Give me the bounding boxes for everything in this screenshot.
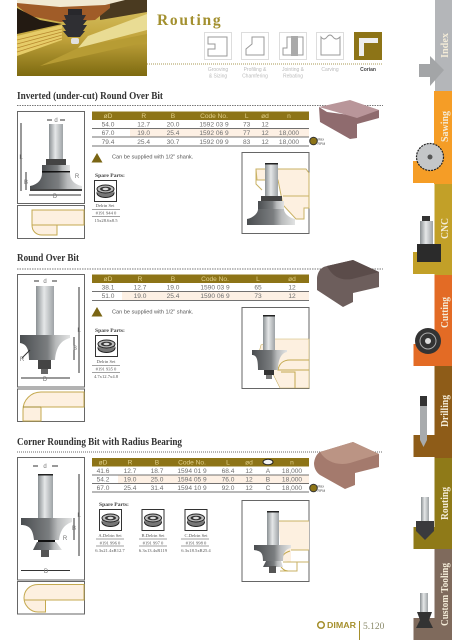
table: inverted bit: 12 bbox=[261, 139, 269, 146]
sidebar tab: custom tooling: Custom Tooling bbox=[440, 563, 451, 626]
table: inverted bit: 1592 06 9 bbox=[199, 130, 229, 137]
icon: profiling bbox=[242, 32, 268, 60]
panel: round over bit in work bbox=[242, 308, 309, 388]
panel: inverted bit diagram: d bbox=[54, 118, 58, 124]
sidebar tab: drilling bbox=[414, 366, 452, 458]
table: corner rounding bit bbox=[92, 458, 309, 492]
heading: round over bit: Round Over Bit bbox=[17, 253, 80, 264]
product image: corner rounding sample bbox=[314, 442, 379, 489]
panel: corner rounding bit in work bbox=[242, 500, 309, 582]
table: round over bit: 12 bbox=[288, 293, 296, 300]
table: inverted bit: 25.4 bbox=[167, 130, 180, 137]
table: inverted bit: 79.4 bbox=[102, 139, 115, 146]
icon: max rpm: RPM bbox=[318, 489, 325, 493]
spare parts: corner rounding bit: 6.3x21.4xR12.7 bbox=[95, 548, 125, 553]
table: corner rounding bit: 54.2 bbox=[97, 476, 110, 484]
panel: corner rounding bit diagram: D bbox=[44, 569, 49, 575]
table: inverted bit: Code No. bbox=[200, 113, 228, 120]
icon: warning triangle bbox=[92, 153, 102, 162]
table: corner rounding bit: 12 bbox=[245, 476, 253, 484]
table: inverted bit: 12.7 bbox=[137, 122, 150, 128]
table: corner rounding bit: ød bbox=[245, 460, 253, 466]
table: corner rounding bit: 12.7 bbox=[124, 468, 137, 475]
table: round over bit: 73 bbox=[254, 293, 262, 300]
table: inverted bit: 67.0 bbox=[102, 130, 115, 137]
spare parts: inverted bit: #191 944 0 bbox=[96, 210, 117, 216]
spare parts: round over bit: #191 935 0 bbox=[96, 366, 117, 372]
spare parts: corner rounding bit: Spare Parts: bbox=[99, 502, 129, 508]
panel: inverted bit diagram: R bbox=[75, 174, 80, 180]
table: corner rounding bit: 67.0 bbox=[97, 485, 110, 492]
spare parts: inverted bit: Spare Parts: bbox=[95, 173, 125, 179]
table: inverted bit: 25.4 bbox=[137, 139, 150, 146]
table: inverted bit: 73 bbox=[243, 122, 251, 128]
page number: 5.120 bbox=[363, 622, 385, 632]
table: round over bit bbox=[92, 274, 309, 300]
table: corner rounding bit: 25.0 bbox=[151, 476, 164, 484]
spare parts: round over bit: Delrin Set bbox=[97, 359, 116, 364]
note: shank: Can be supplied with 1/2" shank. bbox=[112, 154, 194, 160]
category labels: & Sizing bbox=[209, 74, 227, 80]
table: inverted bit: n bbox=[287, 113, 291, 120]
table: round over bit: 65 bbox=[254, 284, 262, 292]
panel: corner rounding bit diagram: L bbox=[77, 513, 81, 519]
category labels bbox=[208, 67, 376, 80]
table: corner rounding bit: 1594 05 9 bbox=[177, 476, 207, 484]
spare parts: corner rounding bit: B.Delrin Set bbox=[142, 533, 165, 538]
spare parts: corner rounding bit: C.Delrin Set bbox=[185, 533, 208, 538]
sidebar tab: index bbox=[419, 0, 452, 91]
spare parts: corner rounding bit: A.Delrin Set bbox=[98, 533, 122, 538]
page number bbox=[360, 621, 385, 640]
panel: round over bit diagram: d bbox=[43, 279, 47, 285]
icon: max rpm: RPM bbox=[318, 142, 325, 146]
photo: router bit cutting wood bbox=[17, 0, 147, 76]
panel: inverted bit diagram: L bbox=[19, 155, 23, 161]
category labels: Rebating bbox=[283, 74, 303, 80]
category labels: Profiling & bbox=[244, 67, 267, 73]
table: corner rounding bit: 25.4 bbox=[124, 485, 137, 492]
table: corner rounding bit: 18,000 bbox=[282, 476, 302, 484]
table: round over bit: 25.4 bbox=[167, 293, 180, 300]
table: inverted bit: 54.0 bbox=[102, 122, 115, 128]
sidebar tab: cutting bbox=[414, 275, 452, 366]
table: inverted bit: 18,000 bbox=[279, 139, 299, 146]
product image: inverted sample bbox=[319, 100, 379, 139]
sidebar tab: cutting: Cutting bbox=[440, 297, 451, 328]
panel: corner rounding bit diagram bbox=[18, 458, 84, 580]
footer logo bbox=[318, 621, 356, 630]
table: round over bit: 12.7 bbox=[134, 284, 147, 292]
panel: inverted bit diagram: B bbox=[24, 180, 28, 186]
spare parts: inverted bit bbox=[92, 173, 125, 223]
table: round over bit: 19.0 bbox=[167, 284, 180, 292]
table: inverted bit: 1592 03 9 bbox=[199, 122, 229, 128]
spare parts: corner rounding bit: 6.3x18.5xR25.4 bbox=[181, 548, 211, 553]
table: inverted bit: øD bbox=[104, 113, 113, 120]
spare parts: round over bit: 4.7x12.7x4.8 bbox=[94, 374, 119, 379]
table: inverted bit: L bbox=[245, 113, 249, 120]
panel: corner rounding bit diagram: d bbox=[43, 464, 47, 470]
table: corner rounding bit: 18,000 bbox=[282, 485, 302, 492]
table: corner rounding bit: C bbox=[266, 485, 271, 492]
product image: round over sample bbox=[317, 260, 379, 307]
table: inverted bit: R bbox=[141, 113, 146, 120]
icon: max rpm: Max bbox=[318, 138, 324, 142]
spare parts: round over bit bbox=[92, 328, 125, 379]
panel: round over bit diagram: D bbox=[43, 377, 48, 383]
table: corner rounding bit: 76.0 bbox=[222, 476, 235, 484]
table: corner rounding bit: 19.0 bbox=[124, 476, 137, 484]
panel: corner rounding bit diagram: R bbox=[63, 536, 68, 542]
panel: inverted bit diagram bbox=[18, 112, 84, 204]
icon: max rpm bbox=[310, 484, 325, 493]
table: inverted bit bbox=[92, 112, 309, 146]
spare parts: corner rounding bit: 6.3x13.4xR119 bbox=[139, 548, 168, 553]
footer logo: DIMAR bbox=[327, 621, 356, 630]
table: corner rounding bit: Code No. bbox=[178, 460, 206, 466]
table: corner rounding bit: 1594 01 9 bbox=[177, 468, 207, 475]
icon: carving bbox=[316, 32, 344, 60]
sidebar tab: index: Index bbox=[440, 33, 451, 58]
table: round over bit: 51.0 bbox=[102, 293, 115, 300]
table: round over bit: 1590 03 9 bbox=[200, 284, 230, 292]
panel: inverted profile bbox=[18, 206, 84, 238]
panel: round over bit diagram bbox=[18, 274, 84, 387]
icon: max rpm bbox=[310, 137, 325, 146]
table: inverted bit: 18,000 bbox=[279, 130, 299, 137]
heading: inverted round over bit: Inverted (under-cut) Round Over Bit bbox=[17, 91, 164, 102]
table: inverted bit: 12 bbox=[261, 130, 269, 137]
table: inverted bit: 1592 09 9 bbox=[199, 139, 229, 146]
table: inverted bit: ød bbox=[261, 113, 269, 120]
table: round over bit: L bbox=[256, 276, 260, 283]
icon: jointing bbox=[280, 32, 306, 60]
table: corner rounding bit: 12 bbox=[245, 485, 253, 492]
table: corner rounding bit: 92.0 bbox=[222, 485, 235, 492]
table: round over bit: Code No. bbox=[201, 276, 229, 283]
table: round over bit: 38.1 bbox=[102, 284, 115, 292]
icon: grooving bbox=[204, 32, 232, 60]
table: round over bit: B bbox=[171, 276, 176, 283]
spare parts: inverted bit: Delrin Set bbox=[96, 203, 115, 208]
table: corner rounding bit: 1594 10 9 bbox=[177, 485, 207, 492]
sidebar tab: sawing bbox=[413, 91, 452, 184]
spare parts: corner rounding bit: #191 997 0 bbox=[143, 540, 164, 546]
table: round over bit: 12 bbox=[288, 284, 296, 292]
icon: corian bbox=[354, 32, 382, 60]
table: inverted bit: B bbox=[171, 113, 176, 120]
panel: inverted bit in work bbox=[242, 152, 309, 234]
table: corner rounding bit: B bbox=[155, 460, 160, 466]
table: corner rounding bit: øD bbox=[99, 460, 108, 466]
panel: corner rounding bit diagram: B bbox=[72, 526, 76, 532]
panel: round over bit diagram: R bbox=[20, 357, 25, 363]
table: corner rounding bit: 12 bbox=[245, 468, 253, 475]
table: corner rounding bit: 31.4 bbox=[151, 485, 164, 492]
table: corner rounding bit: R bbox=[128, 460, 133, 466]
table: round over bit: øD bbox=[104, 276, 113, 283]
category icons bbox=[204, 32, 382, 60]
category labels: Carving bbox=[321, 67, 339, 73]
spare parts: inverted bit: 15x28.6x8.5 bbox=[95, 218, 118, 223]
table: corner rounding bit: n bbox=[290, 460, 294, 466]
table: corner rounding bit: 18,000 bbox=[282, 468, 302, 475]
table: round over bit: ød bbox=[288, 276, 296, 283]
sidebar tab: cnc bbox=[413, 184, 452, 275]
title: Routing bbox=[157, 12, 222, 29]
table: corner rounding bit: 68.4 bbox=[222, 468, 235, 475]
category labels: Grooving bbox=[208, 67, 228, 73]
table: corner rounding bit: 41.6 bbox=[97, 468, 110, 475]
table: inverted bit: 12 bbox=[261, 122, 269, 128]
sidebar tab: sawing: Sawing bbox=[440, 111, 451, 142]
table: inverted bit: 30.7 bbox=[167, 139, 180, 146]
table: round over bit: 19.0 bbox=[134, 293, 147, 300]
dotted rule under icons bbox=[147, 63, 383, 65]
spare parts: corner rounding bit: #191 998 0 bbox=[186, 540, 207, 546]
panel: round over bit diagram: L bbox=[77, 328, 81, 334]
table: corner rounding bit: A bbox=[266, 468, 271, 475]
sidebar tab: cnc: CNC bbox=[440, 218, 451, 239]
table: corner rounding bit: 18.7 bbox=[151, 468, 164, 475]
sidebar tab: routing: Routing bbox=[440, 487, 451, 520]
sidebar tab: routing bbox=[414, 458, 452, 549]
category labels: Corian bbox=[360, 67, 376, 73]
table: round over bit: R bbox=[138, 276, 143, 283]
spare parts: corner rounding bit bbox=[95, 502, 211, 553]
panel: round over bit diagram: B bbox=[73, 346, 77, 352]
panel: inverted bit diagram: D bbox=[53, 194, 58, 200]
table: corner rounding bit: B bbox=[266, 476, 271, 484]
table: inverted bit: 83 bbox=[243, 139, 251, 146]
spare parts: round over bit: Spare Parts: bbox=[95, 328, 125, 334]
icon: max rpm: Max bbox=[318, 484, 324, 488]
category labels: Chamfering bbox=[242, 74, 268, 80]
table: corner rounding bit: L bbox=[226, 460, 230, 466]
table: inverted bit: 20.0 bbox=[167, 122, 180, 128]
icon: warning triangle bbox=[92, 307, 102, 316]
category labels: Jointing & bbox=[282, 67, 305, 73]
note: shank: Can be supplied with 1/2" shank. bbox=[112, 310, 194, 316]
panel: corner profile bbox=[18, 582, 84, 614]
table: inverted bit: 77 bbox=[243, 130, 251, 137]
sidebar tab: drilling: Drilling bbox=[440, 395, 451, 427]
heading: corner rounding bit: Corner Rounding Bit with Radius Bearing bbox=[17, 437, 182, 448]
panel: round over profile bbox=[18, 389, 84, 422]
table: round over bit: 1590 06 9 bbox=[200, 293, 230, 300]
table: inverted bit: 19.0 bbox=[137, 130, 150, 137]
spare parts: corner rounding bit: #191 996 0 bbox=[100, 540, 121, 546]
sidebar tab: custom tooling bbox=[414, 549, 452, 640]
